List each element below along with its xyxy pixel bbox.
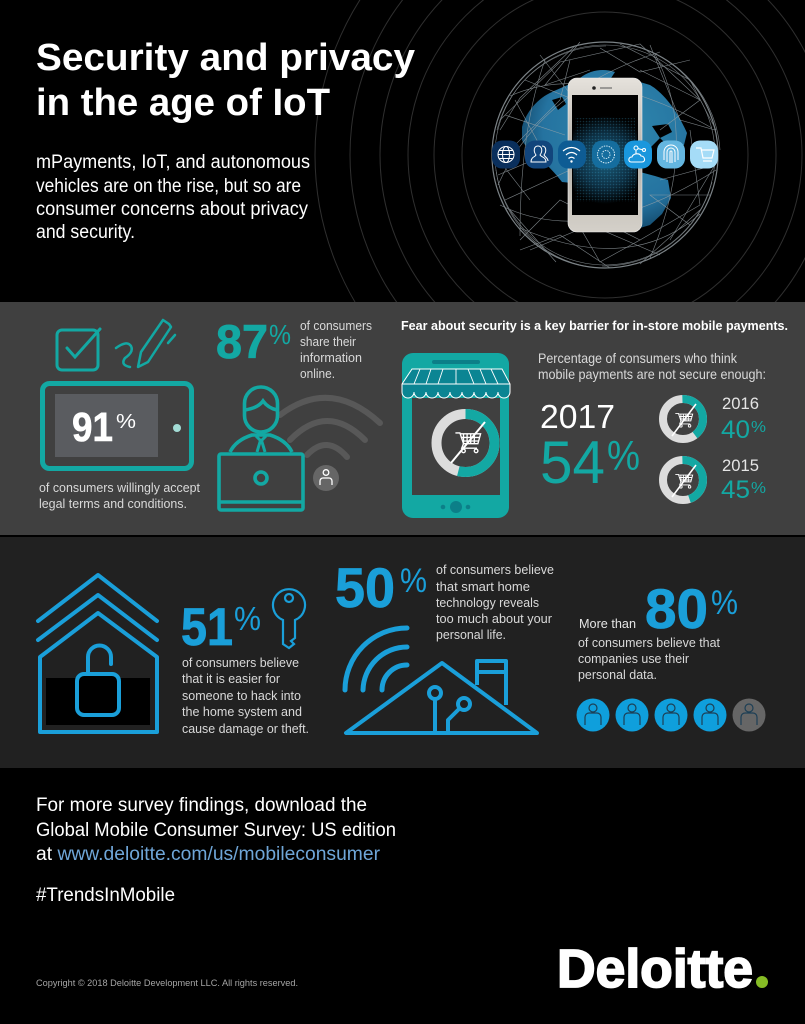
globe illustration with phone and app icons — [492, 42, 720, 268]
stat: 2015 — [721, 456, 766, 504]
text: percentage description: Percentage of consumers who think — [538, 350, 738, 366]
stat: 50 percent: % — [400, 562, 427, 600]
stat: 87 percent — [216, 315, 291, 368]
text: terms and conditions: of consumers willingly accept — [39, 480, 200, 495]
stat: 51 percent: 51 — [181, 598, 233, 657]
title: Security and privacy — [36, 37, 415, 79]
stat: more than 80 percent — [579, 577, 738, 640]
stat: 51 percent: % — [234, 600, 261, 637]
text: share information: of consumers — [300, 318, 372, 333]
intro paragraph: vehicles are on the rise, but so are — [36, 176, 301, 197]
icon: pen with signature — [116, 320, 175, 367]
footer call to action: Global Mobile Consumer Survey: US edition — [36, 820, 396, 841]
text: terms and conditions — [39, 480, 200, 511]
text: companies use data: personal data. — [578, 667, 657, 682]
stat: more than 80 percent: 80 — [645, 577, 708, 640]
title: in the age of IoT — [36, 82, 330, 124]
text: hack into home: of consumers believe — [182, 655, 299, 670]
stat: 87 percent: % — [269, 319, 291, 350]
awning — [402, 369, 510, 398]
stat: 50 percent: 50 — [335, 556, 395, 619]
globe disc shadow — [492, 42, 718, 268]
donut 54 percent — [436, 414, 494, 472]
text: percentage description: mobile payments are not secure enough: — [538, 366, 766, 382]
title — [36, 37, 415, 124]
stat: 2016: 40 — [721, 416, 750, 444]
tablet with 91 percent: 91 — [72, 404, 113, 450]
stat: 2016: 2016 — [722, 394, 759, 413]
intro paragraph — [36, 152, 310, 243]
stat: 2015: 2015 — [722, 456, 759, 475]
icon: wifi — [558, 140, 586, 168]
text: percentage description — [538, 350, 766, 382]
text: smart home reveals — [436, 562, 554, 642]
text: companies use data: of consumers believe that — [578, 635, 720, 650]
icon: gray wifi arcs — [280, 398, 380, 457]
land cutouts — [552, 97, 672, 138]
stat: 2017 54 percent: % — [607, 432, 640, 479]
icon: network sphere — [592, 140, 620, 168]
stat: 87 percent: 87 — [216, 315, 268, 368]
copyright: Copyright © 2018 Deloitte Development LLC. All rights reserved. — [36, 978, 298, 989]
text: smart home reveals: of consumers believe — [436, 562, 554, 577]
icon: checkbox — [57, 329, 100, 370]
icon: shopping cart — [690, 140, 718, 168]
donut 2016 40 percent — [663, 399, 703, 439]
globe land masses — [522, 70, 687, 228]
tablet with 91 percent — [42, 384, 192, 468]
stat: 2017 54 percent: 54 — [540, 429, 605, 496]
icon row: five people — [576, 698, 766, 732]
Deloitte logo: Deloitte — [557, 939, 753, 999]
concentric rings background — [315, 0, 805, 445]
hashtag: #TrendsInMobile — [36, 885, 175, 906]
panel: dark smart home stats — [0, 537, 805, 768]
icon: user badge — [313, 465, 339, 491]
text: hack into home: cause damage or theft. — [182, 721, 309, 736]
icon: wifi over smart roof — [345, 628, 537, 733]
stat: more than 80 percent: More than — [579, 616, 636, 631]
icon: person at laptop — [219, 387, 303, 510]
heading: mobile payments barrier: Fear about security is a key barrier for in-store mobile payments. — [401, 319, 788, 333]
text: hack into home: the home system and — [182, 704, 302, 719]
network mesh — [492, 42, 720, 268]
stat: 2016 — [721, 394, 766, 444]
phone — [568, 78, 642, 232]
text: smart home reveals: technology reveals — [436, 595, 539, 610]
icon: people — [525, 140, 553, 168]
stat: 50 percent — [335, 556, 427, 619]
text: share information: online. — [300, 366, 335, 381]
text: share information: share their — [300, 334, 357, 349]
icon: cloud nodes — [624, 140, 652, 168]
text: smart home reveals: that smart home — [436, 579, 530, 594]
text: terms and conditions: legal terms and conditions. — [39, 496, 187, 511]
icon: globe — [492, 140, 520, 168]
stat: 2016: % — [751, 419, 766, 436]
icon: house with open lock — [38, 575, 157, 732]
text: companies use data — [578, 635, 720, 682]
icon: key — [273, 589, 305, 648]
icon: fingerprint — [657, 140, 685, 168]
stat: 2017 54 percent: 2017 — [540, 398, 615, 435]
stat: 2015: 45 — [721, 476, 750, 504]
text: companies use data: companies use their — [578, 651, 690, 666]
footer call to action: For more survey findings, download the — [36, 795, 367, 816]
intro paragraph: and security. — [36, 222, 135, 243]
donut 2015 45 percent — [663, 460, 703, 500]
tablet with 91 percent: % — [116, 411, 136, 433]
text: hack into home: that it is easier for — [182, 671, 281, 686]
panel: gray security stats — [0, 302, 805, 535]
text: share information — [300, 318, 372, 381]
stat: 2015: % — [751, 480, 766, 497]
footer call to action: at www.deloitte.com/us/mobileconsumer — [36, 844, 381, 865]
stat: 2017 54 percent — [540, 398, 640, 496]
intro paragraph: consumer concerns about privacy — [36, 199, 308, 220]
text: smart home reveals: too much about your — [436, 611, 553, 626]
stat: more than 80 percent: % — [711, 584, 738, 622]
intro paragraph: mPayments, IoT, and autonomous — [36, 152, 310, 173]
text: hack into home: someone to hack into — [182, 688, 301, 703]
text: hack into home — [182, 655, 309, 736]
text: smart home reveals: personal life. — [436, 627, 506, 642]
text: share information: information — [300, 350, 362, 365]
footer call to action — [36, 795, 396, 865]
icon: phone storefront — [402, 353, 510, 518]
